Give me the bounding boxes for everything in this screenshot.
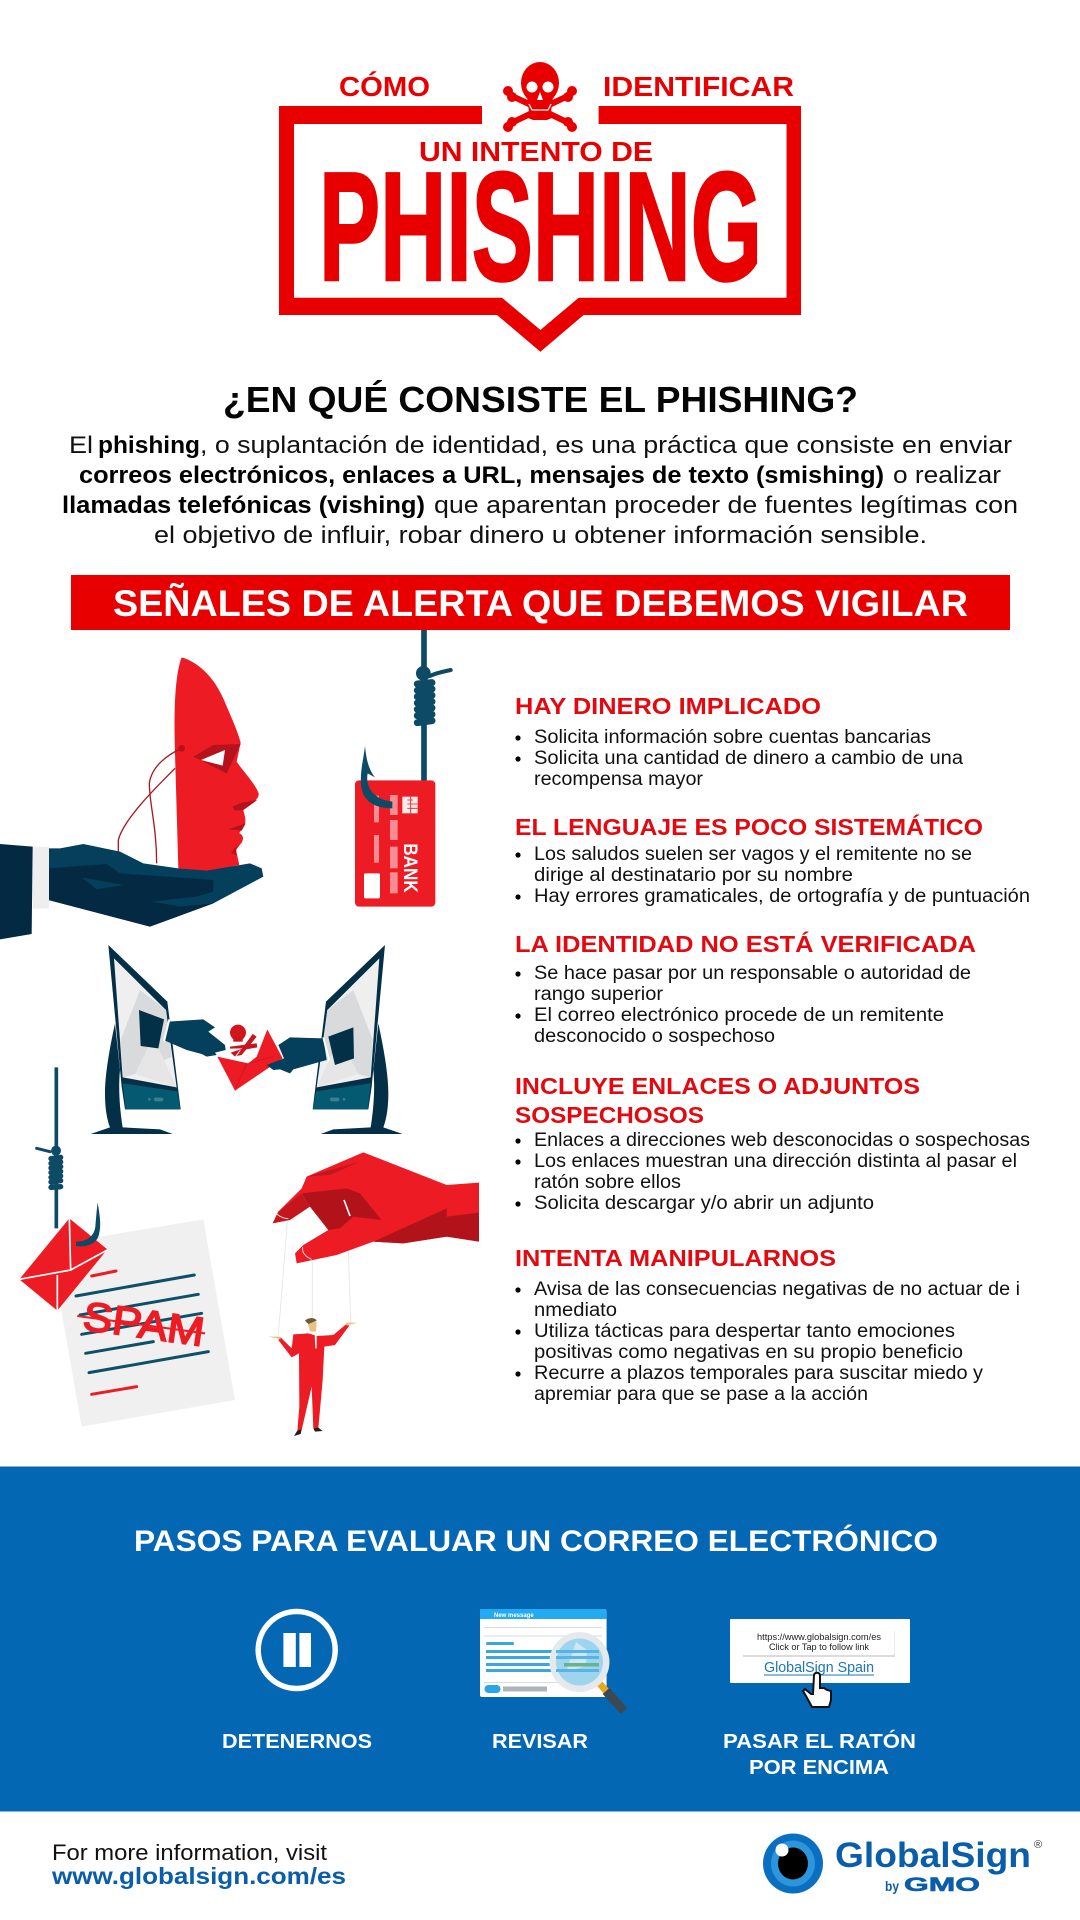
illustration: hand holding mask bbox=[0, 657, 263, 939]
item: hay dinero implicado: recompensa mayor bbox=[534, 769, 704, 790]
text block: definición de phishing: el objetivo de influir, robar dinero u obtener información sensible. bbox=[154, 522, 927, 549]
step: detenernos bbox=[222, 1612, 372, 1753]
item: incluye enlaces o adjuntos sospechosos bbox=[515, 1073, 1030, 1214]
step: pasar el ratón por encima bbox=[723, 1619, 916, 1779]
item: el lenguaje es poco sistemático: EL LENGUAJE ES POCO SISTEMÁTICO bbox=[515, 813, 983, 840]
step: revisar: REVISAR bbox=[492, 1730, 588, 1753]
item: intenta manipularnos: nmediato bbox=[534, 1300, 617, 1321]
panel heading: PASOS PARA EVALUAR UN CORREO ELECTRÓNICO bbox=[134, 1524, 938, 1558]
step: pasar el ratón por encima: PASAR EL RATÓN bbox=[723, 1729, 916, 1753]
title text: identificar: IDENTIFICAR bbox=[603, 71, 794, 102]
illustration: credit card on fishing hook bbox=[355, 630, 451, 907]
skull bbox=[230, 1025, 257, 1057]
panel: pasos para evaluar un correo electrónico bbox=[0, 1466, 1080, 1812]
title text: cómo: CÓMO bbox=[339, 71, 430, 102]
logo: globalsign by gmo: ® bbox=[1034, 1839, 1042, 1851]
text block: definición de phishing bbox=[62, 432, 1018, 549]
icon: pointer hand bbox=[803, 1673, 831, 1707]
section: alert signs text column bbox=[515, 693, 1030, 1405]
fishing line bbox=[51, 1067, 62, 1228]
item: hay dinero implicado: Solicita información sobre cuentas bancarias bbox=[534, 727, 931, 748]
fishing line bbox=[415, 630, 432, 782]
left sleeve bbox=[139, 1010, 164, 1048]
puppet man bbox=[268, 1318, 357, 1436]
item: el lenguaje es poco sistemático: Hay errores gramaticales, de ortografía y de puntuación bbox=[534, 886, 1030, 907]
text block: definición de phishing: , o suplantación de identidad, es una práctica que consiste en enviar bbox=[200, 432, 1012, 459]
icon: skull and crossbones bbox=[503, 62, 577, 132]
right hand bbox=[267, 1037, 327, 1073]
item: incluye enlaces o adjuntos sospechosos: ratón sobre ellos bbox=[534, 1172, 681, 1193]
puppet strings bbox=[278, 1222, 351, 1335]
item: intenta manipularnos: positivas como negativas en su propio beneficio bbox=[534, 1342, 963, 1363]
text block: definición de phishing: llamadas telefónicas (vishing) bbox=[62, 492, 425, 519]
item: el lenguaje es poco sistemático: dirige al destinatario por su nombre bbox=[534, 865, 853, 886]
spam document: SPAM bbox=[80, 1293, 207, 1355]
envelope bbox=[217, 1029, 283, 1091]
step: pasar el ratón por encima: https://www.globalsign.com/es bbox=[757, 1632, 881, 1643]
text block: definición de phishing: o realizar bbox=[893, 462, 1001, 489]
item: la identidad no está verificada: LA IDENTIDAD NO ESTÁ VERIFICADA bbox=[515, 930, 976, 957]
spam document bbox=[50, 1219, 235, 1427]
credit card bbox=[355, 780, 435, 907]
item: intenta manipularnos: INTENTA MANIPULARNOS bbox=[515, 1245, 836, 1271]
text block: definición de phishing: correos electrónicos, enlaces a URL, mensajes de texto (smishing) bbox=[79, 462, 884, 489]
footer: more information: www.globalsign.com/es bbox=[51, 1863, 346, 1889]
item: intenta manipularnos bbox=[515, 1245, 1020, 1405]
right sleeve bbox=[328, 1027, 354, 1065]
text block: definición de phishing: El bbox=[69, 432, 93, 459]
step: detenernos: DETENERNOS bbox=[222, 1730, 372, 1753]
knot bbox=[417, 683, 432, 723]
item: la identidad no está verificada: Se hace pasar por un responsable o autoridad de bbox=[534, 963, 971, 984]
item: intenta manipularnos: Avisa de las consecuencias negativas de no actuar de i bbox=[534, 1279, 1020, 1300]
title text: un intento de: UN INTENTO DE bbox=[419, 136, 653, 167]
left monitor bbox=[91, 945, 181, 1134]
banner: señales de alerta: SEÑALES DE ALERTA QUE DEBEMOS VIGILAR bbox=[113, 582, 968, 624]
footer: more information: For more information, visit bbox=[52, 1840, 327, 1865]
title text: phishing: PHISHING bbox=[319, 140, 762, 313]
hand bbox=[48, 844, 263, 927]
item: la identidad no está verificada: El correo electrónico procede de un remitente bbox=[534, 1005, 944, 1026]
step: revisar: New message bbox=[494, 1613, 534, 1619]
mask bbox=[118, 657, 259, 872]
item: el lenguaje es poco sistemático: Los saludos suelen ser vagos y el remitente no se bbox=[534, 844, 972, 865]
item: hay dinero implicado bbox=[515, 693, 963, 790]
icon: eye bbox=[763, 1834, 823, 1894]
banner: señales de alerta bbox=[71, 575, 1010, 630]
item: incluye enlaces o adjuntos sospechosos: INCLUYE ENLACES O ADJUNTOS bbox=[515, 1073, 920, 1099]
heading: en qué consiste: ¿EN QUÉ CONSISTE EL PHISHING? bbox=[223, 379, 858, 420]
cuff bbox=[33, 847, 49, 909]
knot bbox=[51, 1157, 61, 1187]
text block: definición de phishing: que aparentan proceder de fuentes legítimas con bbox=[434, 492, 1018, 519]
item: intenta manipularnos: apremiar para que se pase a la acción bbox=[534, 1384, 868, 1405]
step: pasar el ratón por encima: POR ENCIMA bbox=[749, 1756, 889, 1779]
hook bbox=[361, 746, 392, 808]
credit card: BANK bbox=[399, 843, 420, 893]
step: revisar bbox=[480, 1609, 624, 1753]
text block: definición de phishing: phishing bbox=[98, 432, 200, 459]
speech bubble frame bbox=[279, 106, 801, 352]
step: pasar el ratón por encima: GlobalSign Spain bbox=[764, 1659, 874, 1676]
logo: globalsign by gmo: by bbox=[885, 1878, 899, 1894]
item: intenta manipularnos: Utiliza tácticas para despertar tanto emociones bbox=[534, 1321, 955, 1342]
illustration: computers exchanging malicious email bbox=[91, 945, 403, 1134]
logo: globalsign by gmo: GlobalSign bbox=[835, 1836, 1031, 1875]
title: cómo identificar un intento de phishing bbox=[279, 62, 801, 352]
item: incluye enlaces o adjuntos sospechosos: Enlaces a direcciones web desconocidas o sospechosas bbox=[534, 1130, 1030, 1151]
item: incluye enlaces o adjuntos sospechosos: SOSPECHOSOS bbox=[515, 1102, 704, 1128]
logo: globalsign by gmo: GMO bbox=[904, 1875, 980, 1896]
illustration: spam document with hooked envelope bbox=[19, 1067, 235, 1427]
item: la identidad no está verificada: desconocido o sospechoso bbox=[534, 1026, 775, 1047]
item: intenta manipularnos: Recurre a plazos temporales para suscitar miedo y bbox=[534, 1363, 984, 1384]
logo: globalsign by gmo bbox=[763, 1834, 1042, 1896]
item: hay dinero implicado: HAY DINERO IMPLICADO bbox=[515, 693, 821, 719]
right monitor bbox=[313, 945, 403, 1134]
hook bbox=[76, 1203, 100, 1246]
footer: more information bbox=[51, 1840, 346, 1889]
item: la identidad no está verificada: rango superior bbox=[534, 984, 664, 1005]
item: hay dinero implicado: Solicita una cantidad de dinero a cambio de una bbox=[534, 748, 963, 769]
step: pasar el ratón por encima: Click or Tap to follow link bbox=[769, 1642, 869, 1653]
illustration: red hand with puppet bbox=[268, 1152, 479, 1436]
envelope on hook bbox=[19, 1218, 107, 1311]
item: el lenguaje es poco sistemático bbox=[515, 813, 1030, 907]
item: la identidad no está verificada bbox=[515, 930, 976, 1047]
item: incluye enlaces o adjuntos sospechosos: Solicita descargar y/o abrir un adjunto bbox=[534, 1193, 874, 1214]
sleeve bbox=[0, 844, 33, 939]
left hand bbox=[165, 1019, 226, 1057]
red hand bbox=[273, 1152, 479, 1263]
item: incluye enlaces o adjuntos sospechosos: Los enlaces muestran una dirección distinta al pasar el bbox=[534, 1151, 1017, 1172]
